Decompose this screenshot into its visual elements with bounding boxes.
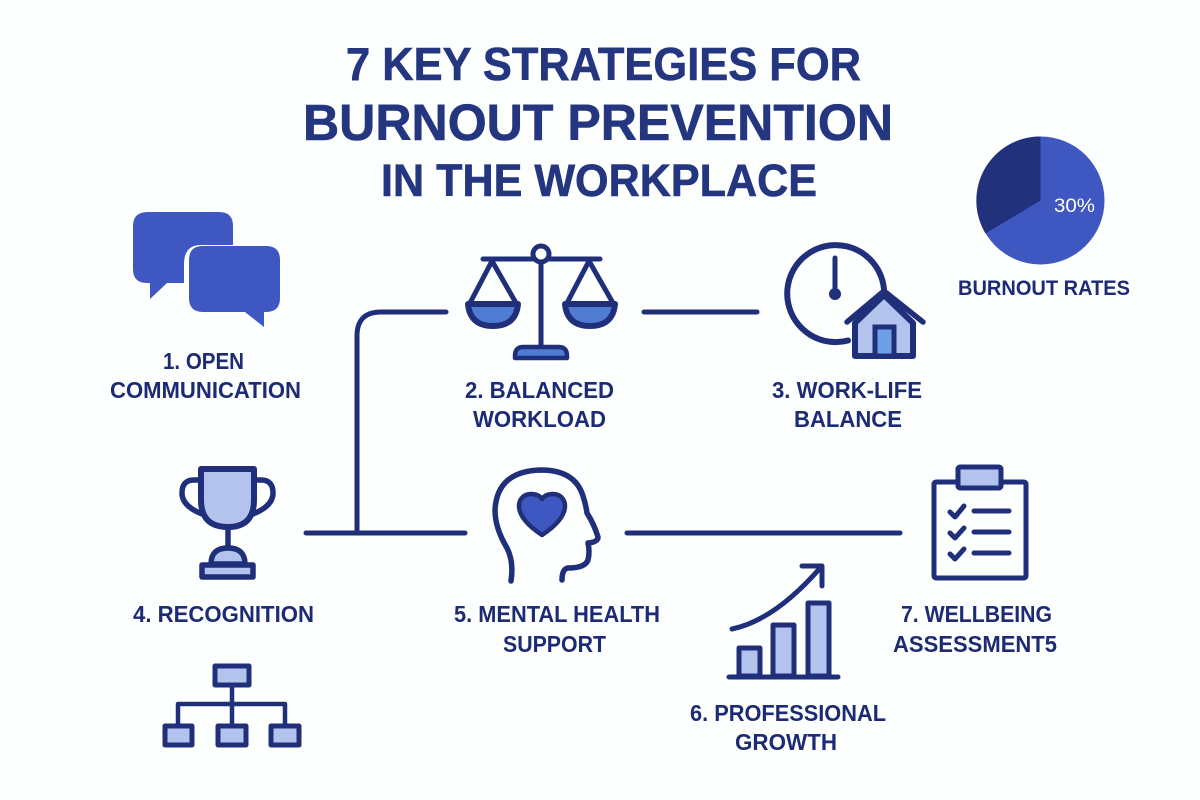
- icon: head with heart: [495, 470, 598, 581]
- label: work-life balance: 3. WORK-LIFE: [772, 377, 922, 403]
- label: mental health support: [454, 601, 660, 657]
- label: open communication: COMMUNICATION: [110, 377, 301, 403]
- connector: scales to clock: [644, 310, 757, 314]
- label: work-life balance: BALANCE: [794, 406, 902, 432]
- label: work-life balance: [772, 377, 922, 432]
- icon: speech bubbles: [133, 212, 280, 327]
- label: professional growth: [690, 700, 886, 755]
- label: wellbeing assessment: [893, 601, 1057, 657]
- label: open communication: [110, 348, 301, 403]
- label: professional growth: GROWTH: [735, 729, 837, 755]
- title: IN THE WORKPLACE: [381, 155, 817, 206]
- label: wellbeing assessment: ASSESSMENT5: [893, 631, 1057, 657]
- title: [303, 38, 893, 206]
- label: balanced workload: WORKLOAD: [473, 406, 606, 432]
- label: recognition: 4. RECOGNITION: [133, 601, 314, 627]
- title: BURNOUT PREVENTION: [303, 94, 893, 151]
- icon: clipboard checklist: [934, 467, 1026, 578]
- label: burnout rates: BURNOUT RATES: [958, 277, 1130, 300]
- label: mental health support: SUPPORT: [503, 631, 606, 657]
- label: mental health support: 5. MENTAL HEALTH: [454, 601, 660, 627]
- title: 7 KEY STRATEGIES FOR: [346, 38, 861, 90]
- connector: head to clipboard: [627, 530, 900, 536]
- icon: growth chart: [729, 566, 838, 677]
- pie chart: burnout rates: 30%: [1054, 196, 1095, 217]
- label: professional growth: 6. PROFESSIONAL: [690, 700, 886, 726]
- label: balanced workload: 2. BALANCED: [465, 377, 614, 403]
- label: open communication: 1. OPEN: [163, 348, 244, 374]
- pie chart: burnout rates: [976, 136, 1104, 264]
- icon: org chart: [165, 666, 299, 745]
- icon: trophy: [182, 469, 273, 577]
- icon: clock and house: [787, 245, 923, 356]
- connector: upper branch and lower line: [306, 312, 465, 533]
- icon: balance scales: [468, 246, 615, 358]
- label: balanced workload: [465, 377, 614, 432]
- label: wellbeing assessment: 7. WELLBEING: [901, 601, 1052, 627]
